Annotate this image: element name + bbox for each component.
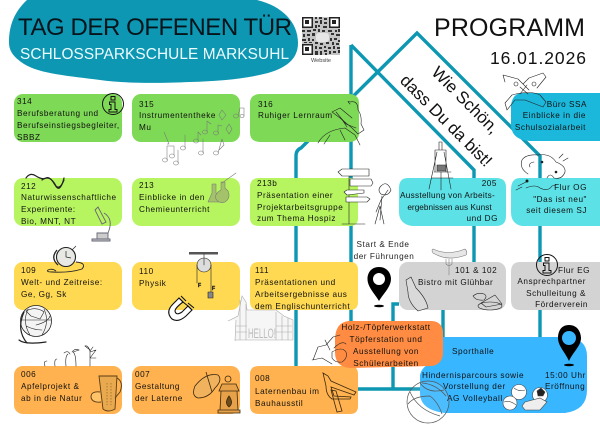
panel: 111: Arbeitsergebnisse aus bbox=[255, 290, 347, 299]
qr centre patch bbox=[316, 33, 329, 42]
panel: 213b bbox=[250, 169, 391, 226]
panel: 212: Experimente: bbox=[21, 205, 76, 214]
panel: 314: 314 bbox=[17, 97, 32, 106]
icon: globe bbox=[19, 306, 52, 343]
QR code bbox=[302, 17, 340, 64]
panel: 110: 110 bbox=[139, 267, 154, 276]
panel: 205: ergebnissen aus Kunst bbox=[407, 203, 492, 212]
icon: sausage on fork bbox=[432, 249, 467, 275]
panel: Holz-/Töpferwerkstatt: Ausstellung von bbox=[353, 347, 419, 356]
main title: TAG DER OFFENEN TÜR bbox=[18, 14, 292, 41]
panel: Sporthalle bbox=[407, 337, 587, 423]
panel: Sporthalle: Eröffnung bbox=[545, 382, 585, 391]
panel: 006: Apfelprojekt & bbox=[21, 382, 80, 391]
slogan rotated bbox=[396, 51, 516, 171]
panel: 110: Physik bbox=[139, 279, 167, 288]
icon: pocket watch bbox=[48, 246, 84, 272]
panel: Holz-/Töpferwerkstatt: Schülerarbeiten bbox=[353, 359, 419, 368]
icon: jug and cup bbox=[91, 376, 121, 411]
panel: 101 & 102: 101 & 102 bbox=[455, 266, 497, 275]
panel: Büro SSA: Büro SSA bbox=[547, 100, 587, 109]
panel: 101 & 102 bbox=[399, 249, 506, 311]
icon: pliers bbox=[323, 373, 356, 412]
icon: horseshoe magnet bbox=[169, 296, 194, 320]
panel: 109: 109 bbox=[21, 266, 36, 275]
panel: 006: ab in die Natur bbox=[21, 394, 82, 403]
panel: 212: 212 bbox=[21, 182, 36, 191]
heading: Programm: PROGRAMM bbox=[434, 14, 585, 42]
panel: Flur OG: "Das ist neu" bbox=[533, 195, 587, 204]
panel: Holz-/Töpferwerkstatt bbox=[312, 321, 443, 368]
panel: 109: Ge, Gg, Sk bbox=[21, 290, 67, 299]
panel: 008 bbox=[250, 366, 358, 414]
panel: 213b: Präsentation einer bbox=[257, 191, 333, 200]
panel: Holz-/Töpferwerkstatt: Töpferstation und bbox=[350, 335, 422, 344]
panel: Flur EG: Förderverein bbox=[535, 300, 588, 309]
panel: 213 bbox=[132, 173, 240, 226]
icon: location pin opening bbox=[558, 325, 581, 366]
panel: 213: 213 bbox=[139, 181, 154, 190]
panel: 007: der Laterne bbox=[135, 394, 183, 403]
panel: 006: 006 bbox=[21, 370, 36, 379]
panel: Flur EG: Ansprechpartner bbox=[517, 277, 586, 286]
panel: 212: Naturwissenschaftliche bbox=[21, 193, 117, 202]
panel: 315 bbox=[132, 94, 244, 165]
panel: 315: 315 bbox=[139, 100, 154, 109]
icon: pulley: F bbox=[212, 286, 215, 292]
panel: 007: 007 bbox=[135, 370, 150, 379]
panel: 315: Mu bbox=[139, 123, 151, 132]
panel: 008: Laternenbau im bbox=[255, 387, 319, 396]
panel: Holz-/Töpferwerkstatt: Holz-/Töpferwerkstatt bbox=[341, 323, 431, 332]
label: start and end of tours bbox=[354, 240, 414, 261]
panel: 101 & 102: Bistro mit Glühbar bbox=[418, 278, 493, 287]
icon: cake plate bbox=[473, 293, 502, 310]
icon: pottery hands bbox=[312, 335, 346, 364]
house outline lines bbox=[296, 33, 540, 389]
label: start and end of tours: der Führungen bbox=[354, 252, 414, 261]
panel: 109 bbox=[14, 246, 122, 343]
icon: flasks bbox=[208, 173, 236, 203]
panel: 315: Instrumententheke bbox=[139, 111, 216, 120]
panel: Büro SSA: Schulsozialarbeit bbox=[515, 123, 586, 132]
panel: 316: 316 bbox=[258, 100, 273, 109]
panel: 006 bbox=[14, 346, 122, 414]
icon: pulley bbox=[189, 252, 218, 298]
icon: dna bbox=[26, 174, 64, 188]
icon: signpost and figure bbox=[338, 169, 391, 224]
icon: easel bbox=[429, 142, 453, 190]
panel: 111: Präsentationen und bbox=[255, 278, 336, 287]
panel: 205: Ausstellung von Arbeits- bbox=[400, 191, 495, 200]
icon: info bbox=[536, 254, 558, 276]
panel: 205: 205 bbox=[482, 179, 497, 188]
panel: Flur OG: Flur OG bbox=[554, 183, 587, 192]
school name: SCHLOSSPARKSCHULE MARKSUHL bbox=[20, 46, 289, 63]
icon: location pin start bbox=[368, 267, 391, 307]
label: start and end of tours: Start & Ende bbox=[357, 240, 409, 249]
panel: 212 bbox=[14, 174, 122, 241]
slogan rotated: Wie Schön, bbox=[428, 63, 503, 138]
panel: Büro SSA: Einblicke in die bbox=[523, 111, 586, 120]
panel: 314: Berufseinstiegsbegleiter, bbox=[17, 121, 120, 130]
icon: bottle bbox=[406, 277, 428, 311]
icon: volleyball bbox=[407, 381, 449, 423]
icon: music notes bbox=[162, 108, 244, 165]
icon: palette and lantern bbox=[194, 372, 240, 413]
panel: Flur OG: seit diesem SJ bbox=[526, 206, 587, 215]
panel: 205: und DG bbox=[467, 214, 498, 223]
website caption: Website bbox=[311, 58, 331, 64]
panel: 314 bbox=[14, 94, 124, 142]
panel: 212: Bio, MNT, NT bbox=[21, 217, 76, 226]
title banner bbox=[9, 0, 298, 83]
panel: 316: Ruhiger Lernraum bbox=[258, 111, 333, 120]
icon: thinking heads bbox=[516, 154, 568, 190]
panel: 213b: zum Thema Hospiz bbox=[257, 214, 336, 223]
panel: 008: Bauhausstil bbox=[255, 399, 303, 408]
panel: 213: Chemieunterricht bbox=[139, 205, 210, 214]
panel: Sporthalle: 15:00 Uhr bbox=[545, 371, 586, 380]
panel: Flur EG: Flur EG bbox=[558, 266, 590, 275]
panel: Sporthalle: AG Volleyball bbox=[447, 394, 503, 403]
icon: microscope bbox=[92, 207, 110, 241]
icon: linked hands bbox=[503, 73, 546, 110]
panel: Flur EG: Schulleitung & bbox=[526, 289, 586, 298]
panel: 213: Einblicke in den bbox=[139, 193, 205, 202]
panel: Sporthalle: Sporthalle bbox=[452, 347, 494, 356]
panel: Büro SSA bbox=[503, 73, 600, 141]
icon: tower bridge sketch: HELLO! bbox=[248, 325, 276, 341]
panel: 007 bbox=[132, 366, 240, 414]
panel: 008: 008 bbox=[255, 374, 270, 383]
panel: Sporthalle: Hindernisparcours sowie bbox=[422, 371, 524, 380]
panel: 316 bbox=[250, 94, 364, 145]
panel: 314: SBBZ bbox=[17, 133, 41, 142]
panel: 213b: Projektarbeitsgruppe bbox=[257, 203, 343, 212]
panel: 213b: 213b bbox=[257, 179, 277, 188]
panel: Flur EG bbox=[511, 254, 600, 310]
icon: sports balls bbox=[503, 384, 548, 410]
panel: 111: 111 bbox=[255, 266, 269, 275]
icon: info bbox=[102, 94, 124, 114]
panel: 111: dem Englischunterricht bbox=[255, 302, 350, 311]
icon: seedlings bbox=[44, 346, 96, 366]
panel: 205 bbox=[399, 142, 506, 226]
panel: 007: Gestaltung bbox=[135, 382, 180, 391]
icon: pulley: F bbox=[198, 283, 201, 289]
icon: reading person bbox=[318, 101, 364, 145]
slogan rotated: dass Du da bist! bbox=[396, 71, 496, 171]
panel: 314: Berufsberatung und bbox=[17, 109, 99, 118]
panel: 111 bbox=[228, 262, 358, 341]
panel: 109: Welt- und Zeitreise: bbox=[21, 278, 103, 287]
panel: Flur OG bbox=[511, 154, 600, 226]
panel: 110 bbox=[132, 252, 240, 320]
panel: Sporthalle: Vorstellung der bbox=[443, 382, 506, 391]
date: 16.01.2026 bbox=[490, 48, 586, 68]
